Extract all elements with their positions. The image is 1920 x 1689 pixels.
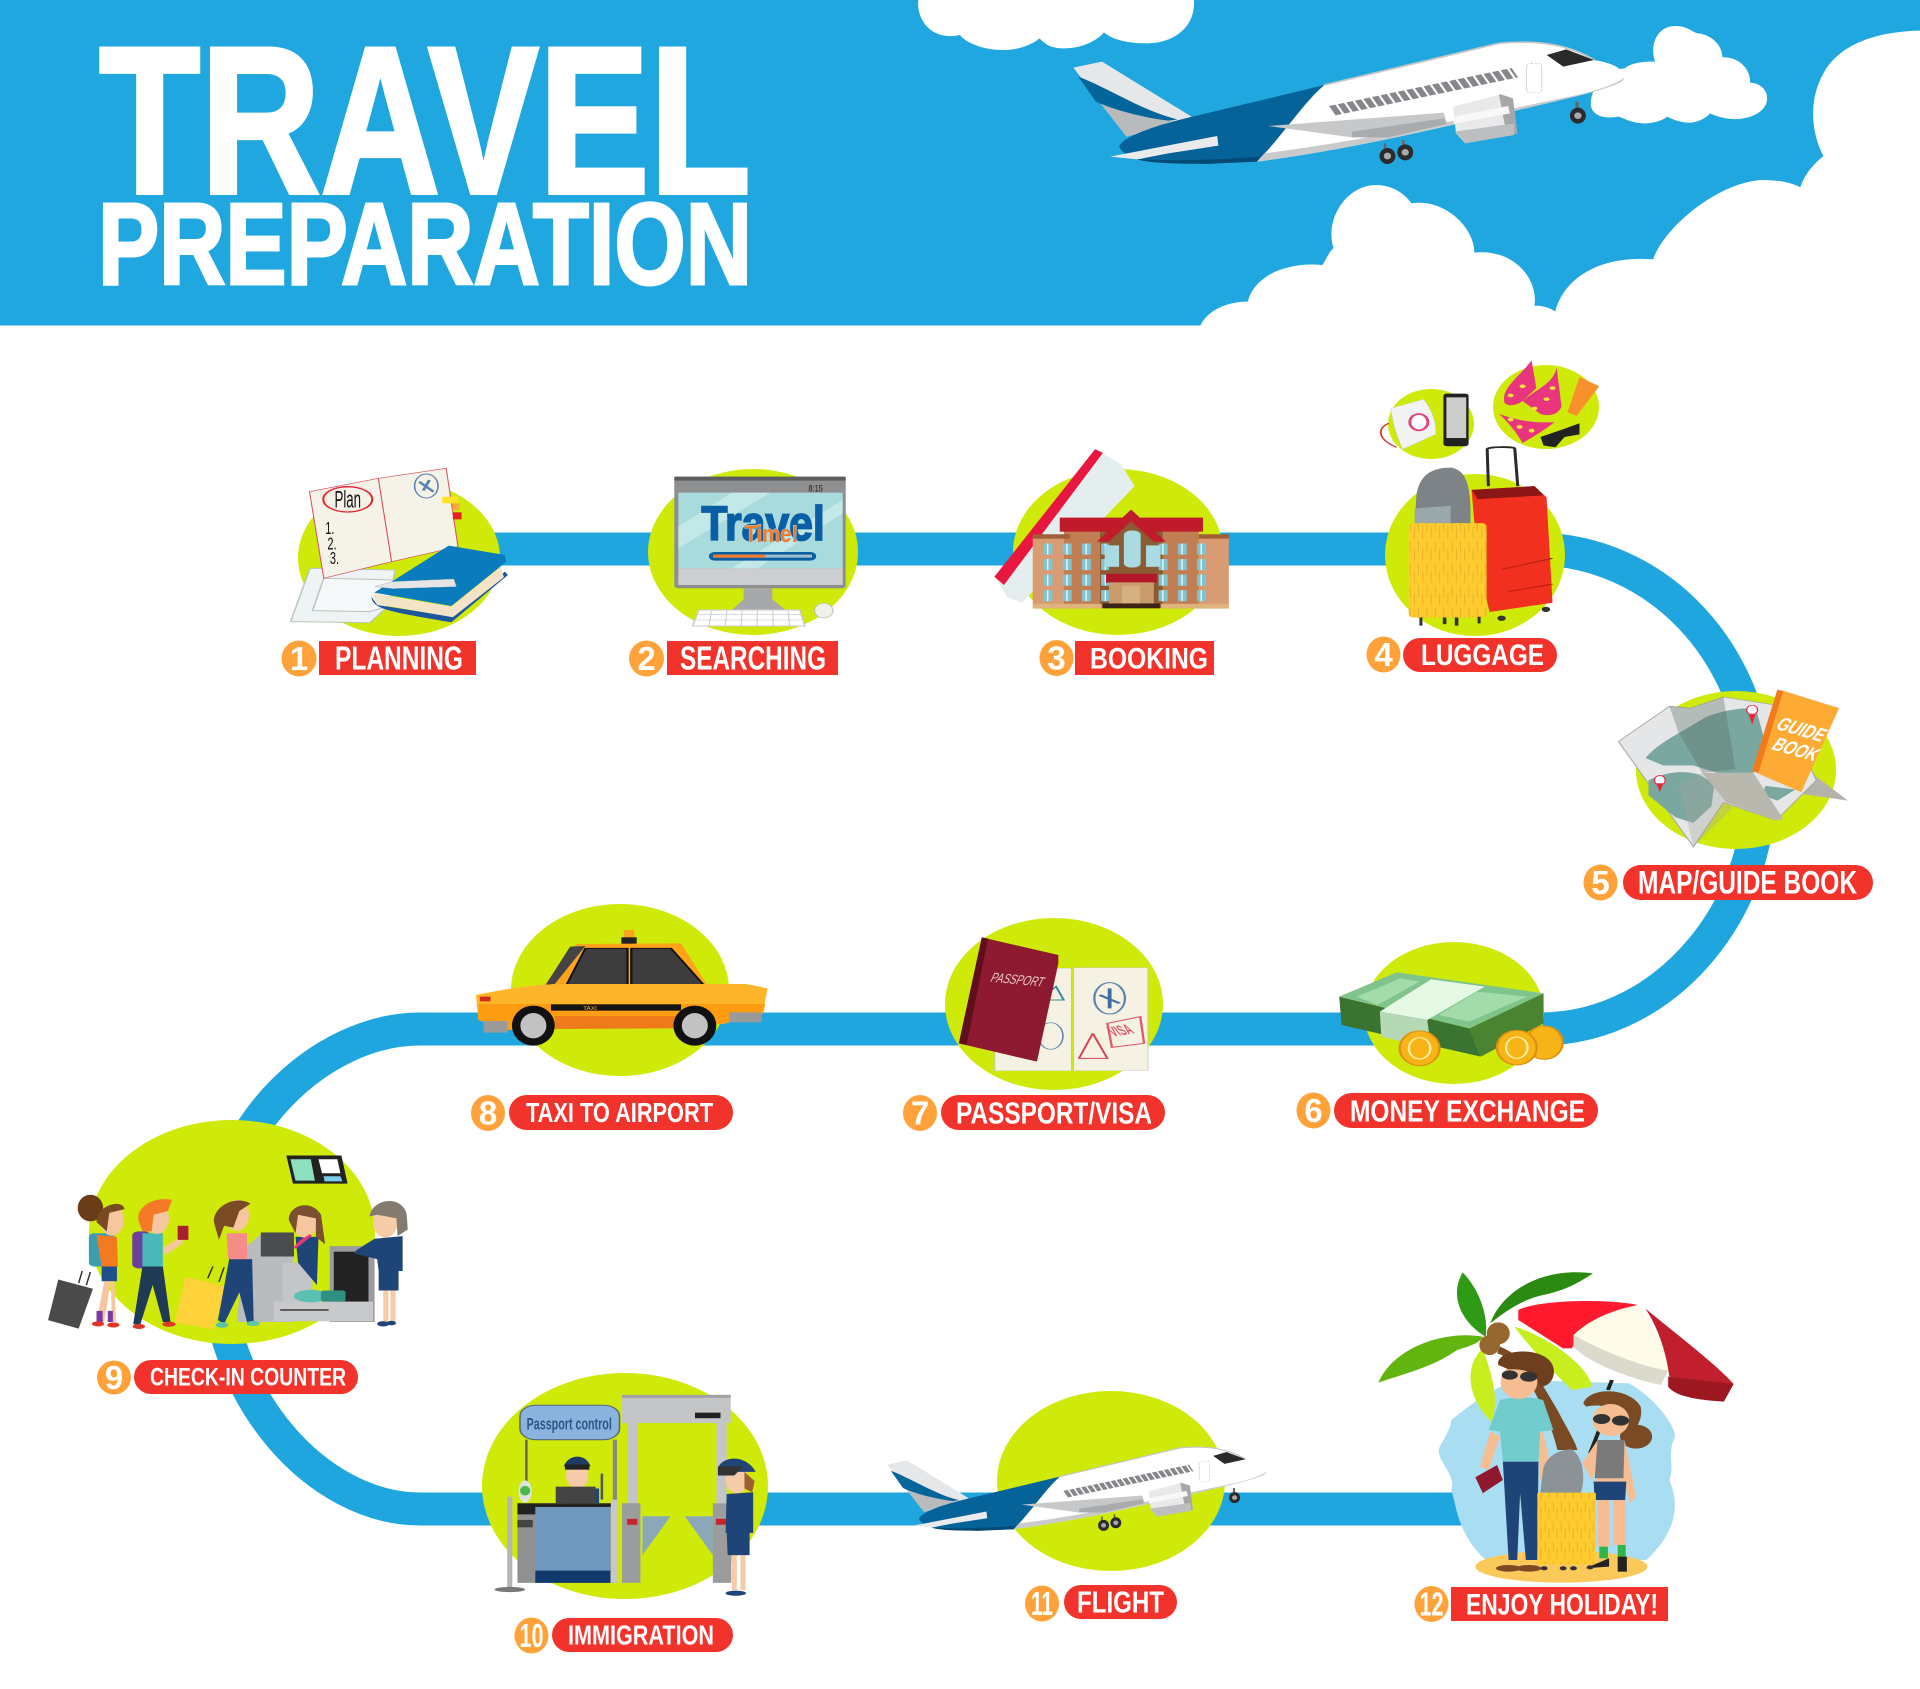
label 5: map/guide book [1584,864,1873,901]
icon: passport control booth and gate [494,1395,756,1596]
header banner [0,0,1920,327]
icon: notebook and book: 2. [327,534,337,553]
label 2: searching [629,640,838,677]
label 8: taxi to airport: 8 [479,1094,497,1132]
icon: map and guide book: GUIDE [1771,714,1832,746]
label 1: planning: PLANNING [335,640,463,676]
icon: passport and visa stamps: VISA [1104,1022,1138,1040]
step 5: map and guide book [1618,690,1848,849]
check-in agent [289,1205,325,1285]
icon: notebook and book: Plan [334,486,361,513]
sand [1475,1551,1648,1583]
label 11: flight: FLIGHT [1077,1584,1164,1620]
step 9: check-in counter [48,1120,408,1344]
icon: computer [674,477,846,626]
airplane [1073,42,1624,164]
label 6: money exchange: 6 [1304,1092,1323,1129]
small circle: camera and phone [1388,389,1474,459]
passenger 2 with passport [132,1199,188,1329]
label 7: passport/visa: 7 [911,1094,929,1132]
icon: notebook and book: 1. [325,519,334,538]
man [1475,1352,1554,1572]
label 12: enjoy holiday: ENJOY HOLIDAY! [1466,1588,1658,1622]
label 1: planning [282,640,476,677]
icon: banknotes and coins [1339,972,1563,1066]
label 10: immigration [514,1617,733,1654]
label 10: immigration: 10 [520,1617,544,1654]
passenger 1 with suitcase [48,1195,125,1329]
label 8: taxi to airport [471,1094,733,1132]
icon: map and guide book [1618,690,1848,847]
label 6: money exchange: MONEY EXCHANGE [1350,1094,1585,1128]
label 2: searching: SEARCHING [680,640,826,676]
icon: airplane [887,1447,1267,1531]
step 6: money exchange [1339,942,1563,1084]
label 8: taxi to airport: TAXI TO AIRPORT [526,1097,713,1128]
icon: taxi: TAXI [583,1005,597,1012]
label 4: luggage: 4 [1374,636,1393,673]
step 1: planning [291,468,508,636]
label 9: check-in counter: CHECK-IN COUNTER [150,1364,346,1392]
label 7: passport/visa [903,1094,1165,1132]
label 2: searching: 2 [637,640,656,677]
step 2: searching [648,469,858,635]
label 9: check-in counter: 9 [105,1359,123,1396]
icon: passport and visa stamps [959,937,1148,1071]
clouds [918,0,1920,327]
palm tree [1378,1272,1593,1450]
paint backdrop [1439,1380,1675,1560]
small circle: swimwear [1493,365,1599,449]
label 11: flight [1025,1584,1177,1622]
step 8: taxi to airport [476,904,768,1076]
label 5: map/guide book: 5 [1591,864,1610,901]
x-ray and counter [237,1232,375,1322]
label 10: immigration: IMMIGRATION [568,1620,714,1650]
step 7: passport/visa [945,918,1163,1090]
icon: computer: Time! [745,520,798,547]
icon: taxi [476,930,768,1046]
step 12: enjoy holiday illustration [1378,1272,1734,1583]
step 4: luggage [1381,360,1599,636]
step 11: flight [887,1391,1267,1571]
label 1: planning: 1 [290,640,308,677]
step 3: booking [994,449,1229,635]
title: TRAVEL: TRAVEL [99,3,751,238]
woman [1582,1391,1652,1572]
label 4: luggage: LUGGAGE [1421,639,1544,672]
label 11: flight: 11 [1031,1585,1053,1622]
label 7: passport/visa: PASSPORT/VISA [956,1096,1152,1130]
icon: passport and visa stamps: PASSPORT [988,971,1047,990]
label 5: map/guide book: MAP/GUIDE BOOK [1638,864,1857,900]
label 3: booking: BOOKING [1090,642,1208,676]
security agent [354,1201,408,1326]
label 9: check-in counter [97,1359,358,1396]
icon: map and guide book: BOOK [1767,734,1825,765]
label 6: money exchange [1296,1092,1598,1129]
label 12: enjoy holiday [1414,1586,1668,1622]
label 3: booking [1040,640,1214,676]
backpack and suitcase [1537,1449,1596,1570]
travel route path [215,549,1759,1509]
icon: luggage and packing items [1381,360,1599,626]
label 12: enjoy holiday: 12 [1420,1586,1444,1622]
label 3: booking: 3 [1047,640,1066,676]
step 10: immigration [482,1373,768,1599]
icon: computer: 8:15 [808,483,823,494]
label 4: luggage [1366,636,1557,673]
passenger 3 with yellow suitcase [175,1200,260,1329]
flight board [286,1156,348,1184]
icon: computer: Travel [701,497,825,551]
beach umbrella [1518,1301,1734,1453]
icon: ticket and hotel [994,449,1229,609]
icon: notebook and book [291,468,508,623]
icon: notebook and book: 3. [330,549,339,568]
icon: passport control booth and gate: Passport control [527,1414,612,1433]
icon: check-in scene [48,1156,408,1329]
title: PREPARATION: PREPARATION [98,179,752,309]
